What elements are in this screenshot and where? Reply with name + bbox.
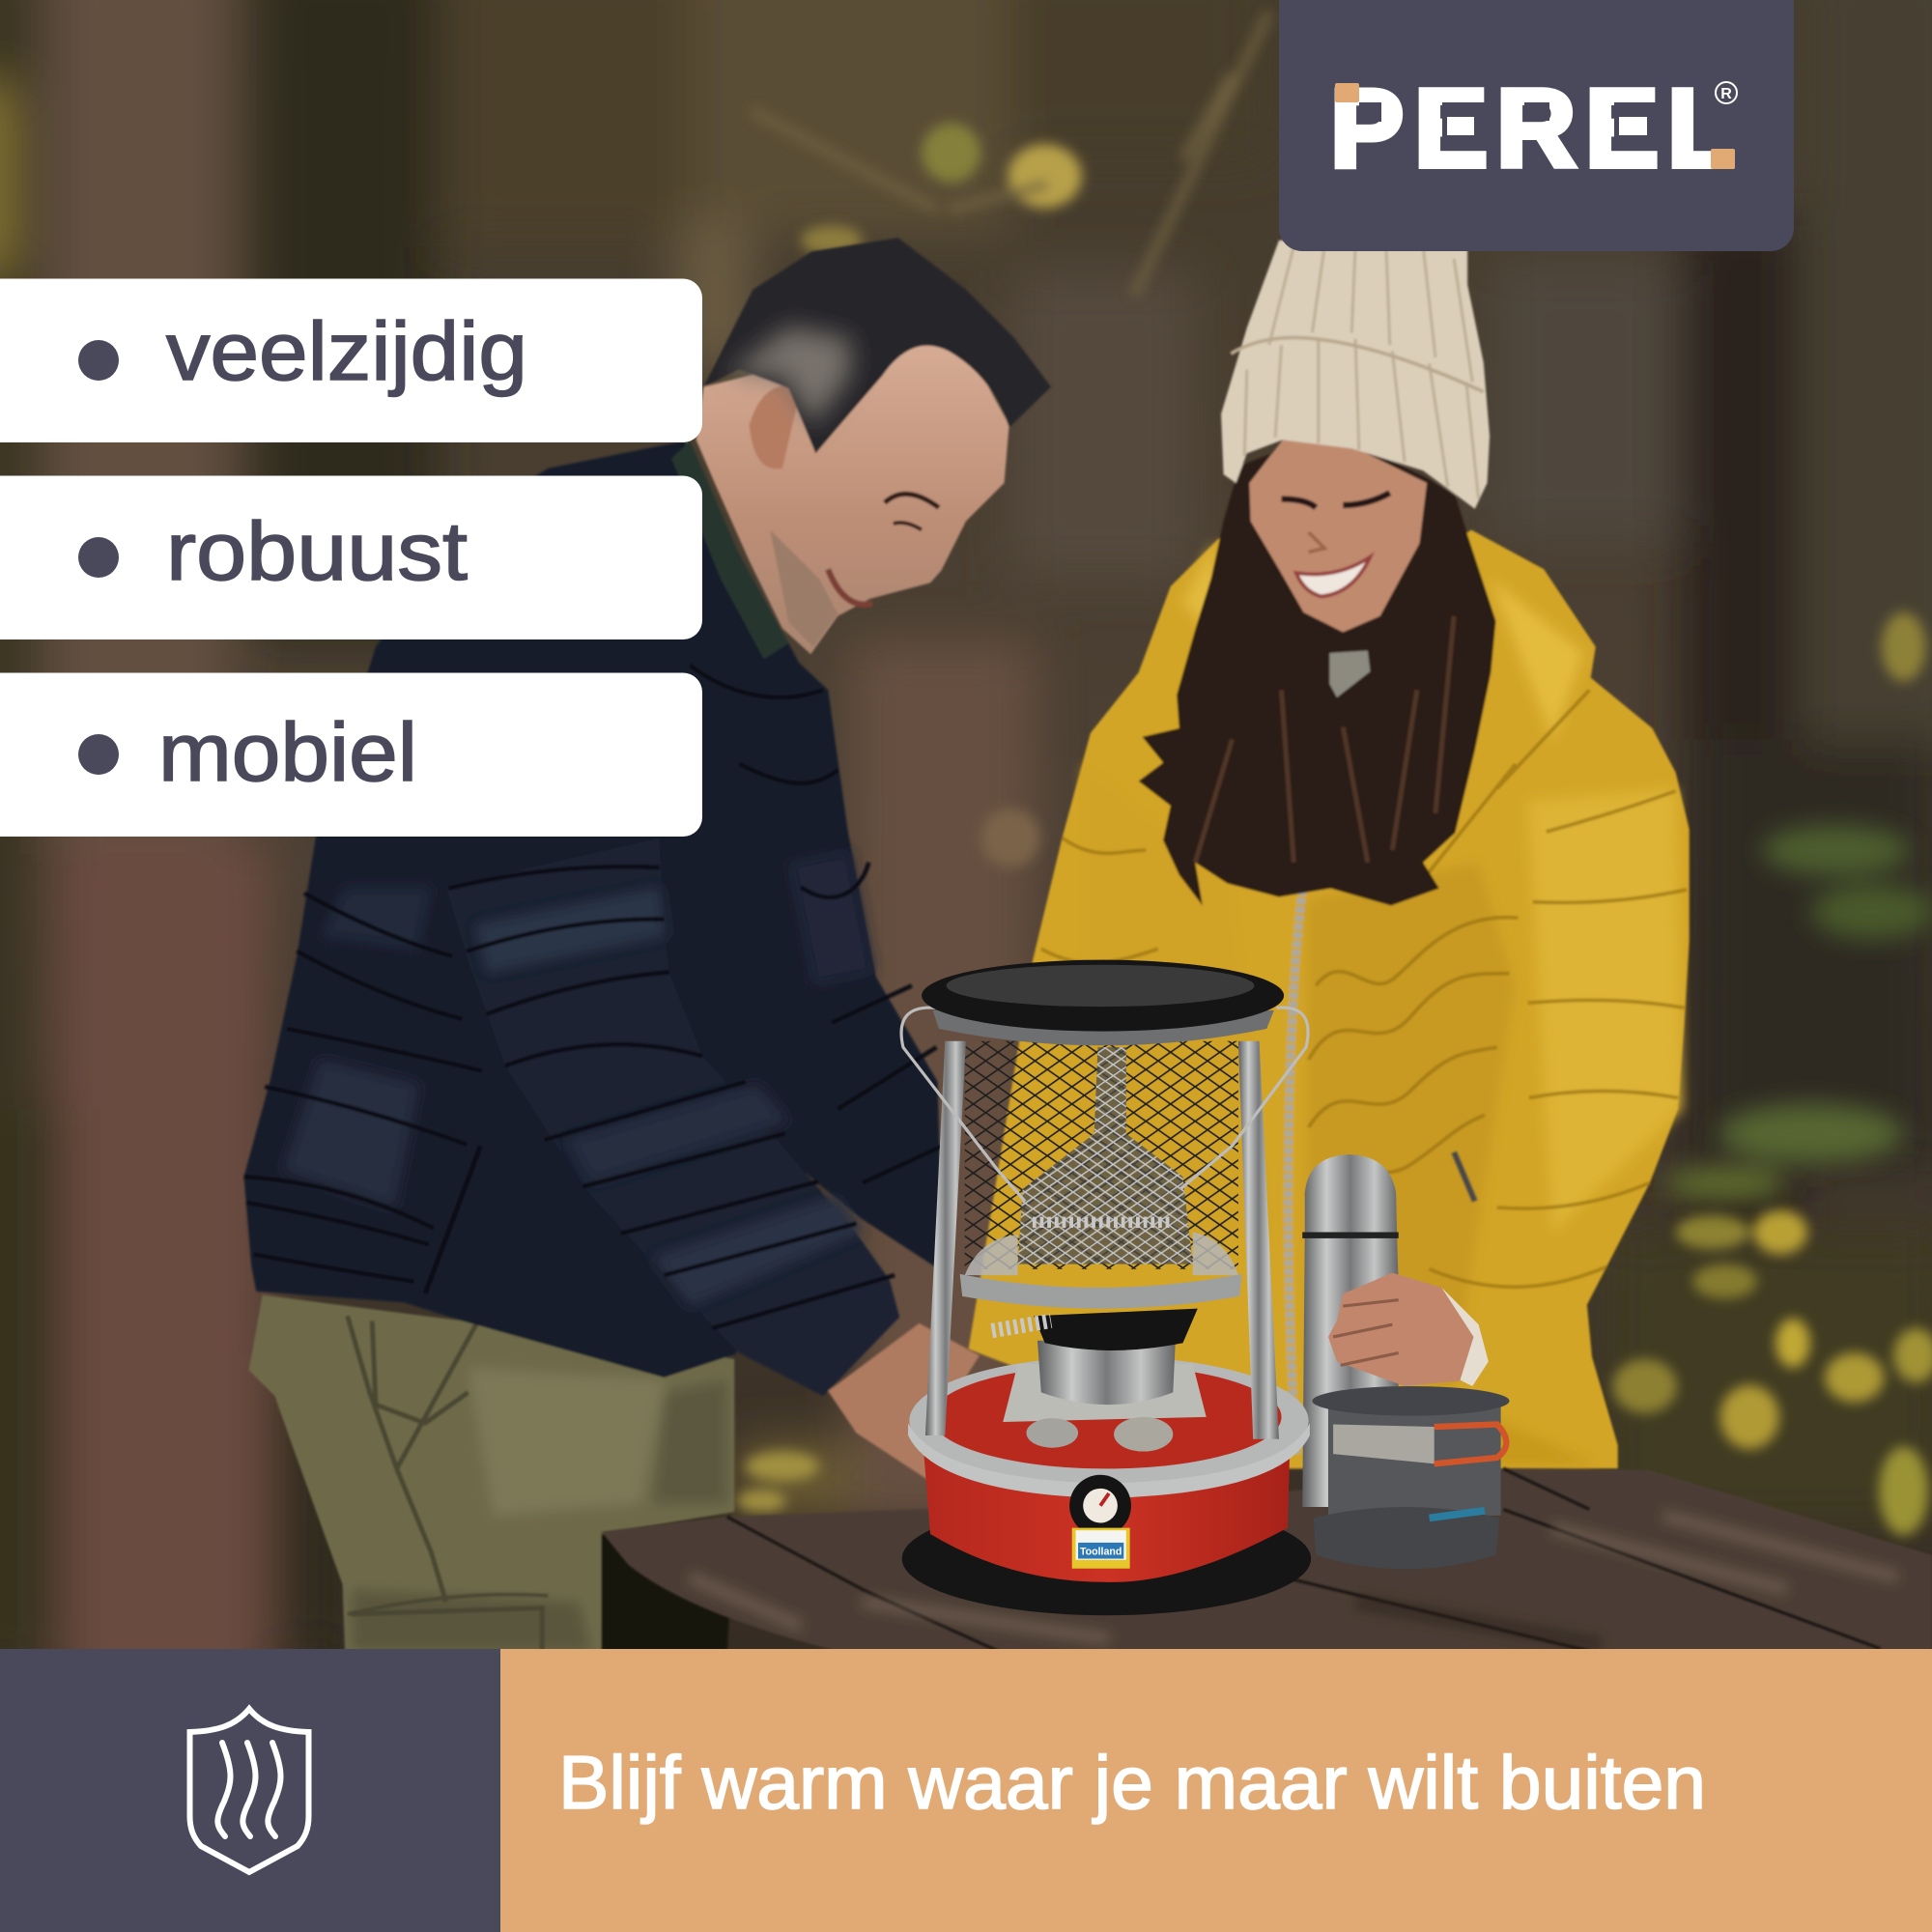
burner collar [1034,1309,1198,1350]
lid [922,960,1284,1032]
upper ring [933,1010,1274,1045]
navy puffer jacket [244,441,943,1396]
knit cuff [1441,1288,1489,1386]
brand sticker: Toolland [1080,1547,1122,1558]
burner cylinder [1037,1341,1176,1405]
thermos [1302,1154,1399,1507]
bullet [78,537,119,578]
inner mesh cone [1018,1047,1193,1264]
PEREL logo wordmark: PEREL [1330,68,1735,190]
filler caps [1026,1418,1078,1448]
mesh [965,1041,1238,1269]
footer panel: slogan [500,1649,1932,1932]
icon: shield with heat waves [189,1709,309,1872]
label text: robuust [166,506,468,598]
feature label: robuust [0,475,702,639]
picnic table [601,1468,1932,1651]
sweater [1329,650,1370,697]
feature label: veelzijdig [0,278,702,442]
hand [828,1323,980,1480]
torso [244,441,838,1378]
hair [703,238,1051,453]
label text: veelzijdig [166,306,527,398]
bullet [78,340,119,381]
jacket shading [1084,542,1682,1466]
lower mesh dome [965,1233,1238,1275]
slogan text: Blijf warm waar je maar wilt buiten [558,1740,1706,1825]
face [1249,440,1427,632]
ear [750,385,801,469]
knob [1069,1475,1131,1537]
kerosene heater [901,960,1311,1615]
man [244,238,1051,1651]
frame legs [925,1041,966,1435]
long dark hair [1139,431,1495,905]
drip tray [902,1502,1311,1615]
brand sticker [1072,1528,1130,1569]
heater tank [923,1441,1290,1582]
burner plate [1003,1364,1207,1422]
tank top [909,1356,1309,1485]
yellow puffer jacket [969,529,1690,1468]
bullet [78,734,119,775]
footer panel: icon [0,1649,500,1932]
logo panel [1279,0,1794,251]
lower ring [960,1274,1242,1309]
forearm sleeve [446,838,899,1396]
pocket zip [1454,1152,1475,1202]
coil [1033,1218,1173,1227]
wire handle [901,1008,1308,1202]
beanie [1221,241,1490,509]
zipper [1288,881,1303,1454]
camping pot [1312,1386,1509,1569]
feature label: mobiel [0,672,702,837]
woman's hand on thermos [1328,1273,1489,1386]
neck [1306,610,1380,656]
head [696,323,1009,654]
olive trousers [249,1295,734,1651]
PEREL logo wordmark: R [1720,86,1732,102]
label text: mobiel [158,707,417,799]
dark far leg [602,1534,730,1649]
far arm [690,653,943,1271]
woman [969,241,1690,1468]
